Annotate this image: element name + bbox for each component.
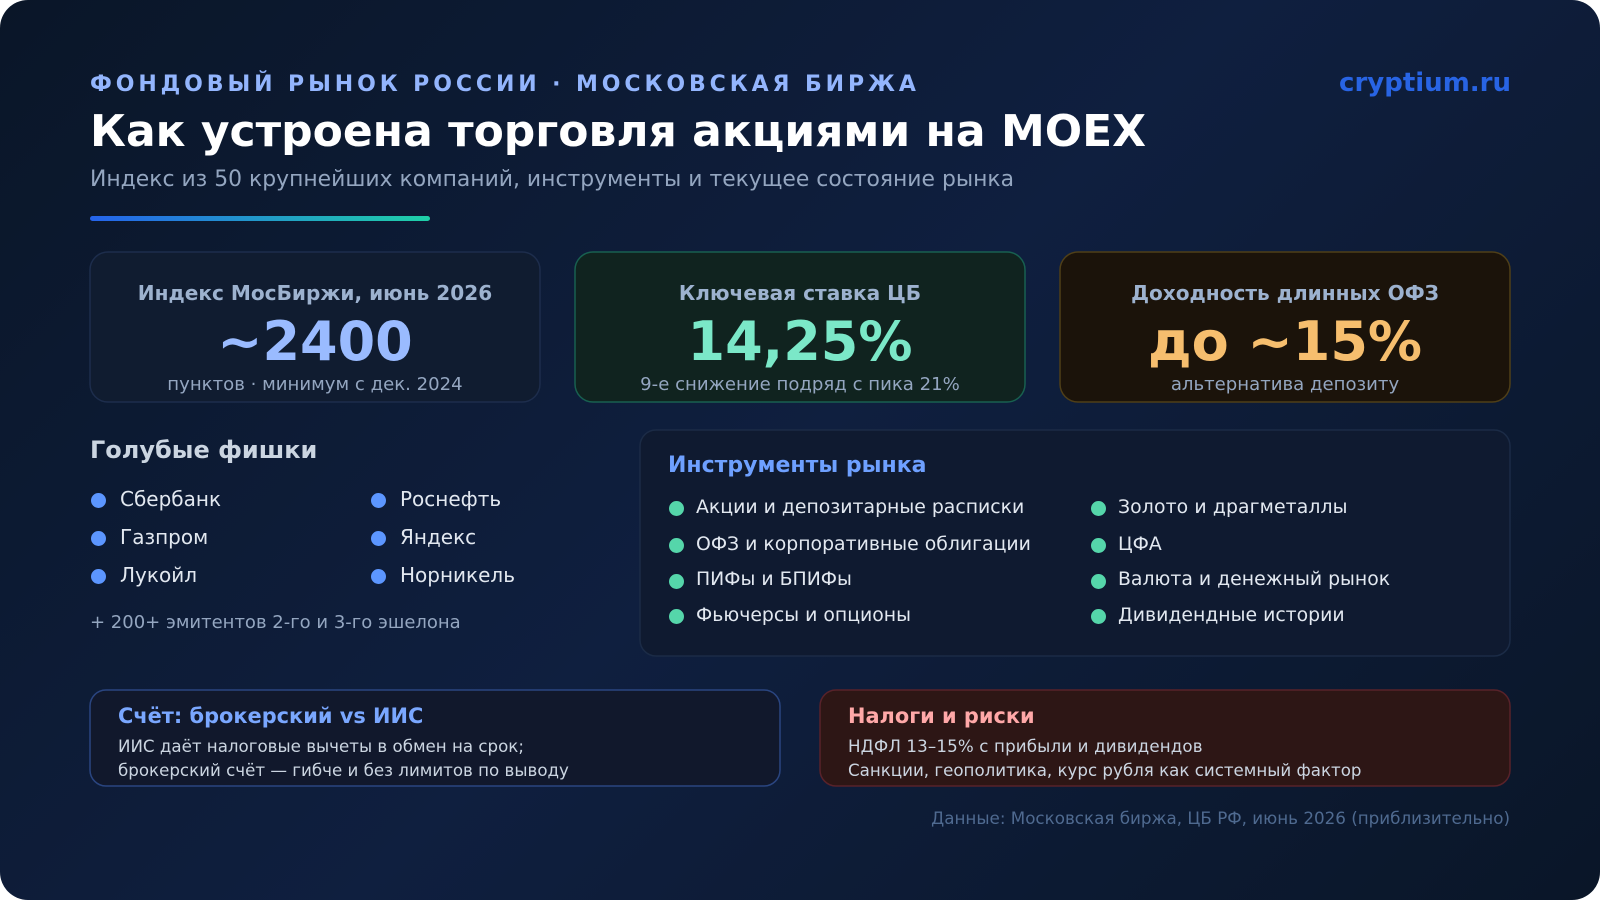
panel: key rate card: [574, 251, 1026, 403]
card value: ~2400: [217, 310, 413, 373]
panel: blue chips: [90, 436, 515, 633]
subtitle: Индекс из 50 крупнейших компаний, инструменты и текущее состояние рынка: [90, 167, 1014, 192]
panel: market instruments: [640, 429, 1511, 657]
body text: НДФЛ 13–15% с прибыли и дивидендов: [848, 737, 1203, 756]
list item: Фьючерсы и опционы: [696, 605, 911, 626]
brand: cryptium.ru: [1339, 68, 1511, 98]
list item: Золото и драгметаллы: [1118, 497, 1348, 518]
list item: Сбербанк: [120, 487, 221, 511]
card note: пунктов · минимум с дек. 2024: [167, 374, 463, 395]
note: + 200+ эмитентов 2-го и 3-го эшелона: [90, 612, 461, 633]
card value: до ~15%: [1148, 310, 1422, 373]
list item: [1091, 534, 1162, 555]
panel: index card: [89, 251, 541, 403]
source note: Данные: Московская биржа, ЦБ РФ, июнь 2026 (приблизительно): [931, 808, 1510, 828]
panel: OFZ yield card: [1059, 251, 1511, 403]
card note: 9-е снижение подряд с пика 21%: [640, 374, 960, 395]
title: Как устроена торговля акциями на MOEX: [90, 106, 1146, 157]
card label: Ключевая ставка ЦБ: [679, 281, 921, 305]
heading: Голубые фишки: [90, 436, 317, 464]
eyebrow: ФОНДОВЫЙ РЫНОК РОССИИ · МОСКОВСКАЯ БИРЖА: [90, 72, 920, 97]
list item: Валюта и денежный рынок: [1118, 569, 1390, 590]
panel: taxes and risks: [819, 689, 1511, 787]
list item: ЦФА: [1118, 534, 1162, 555]
list item: Роснефть: [400, 487, 501, 511]
list item: ОФЗ и корпоративные облигации: [696, 534, 1031, 555]
panel: account types: [89, 689, 781, 787]
heading: Инструменты рынка: [668, 453, 927, 478]
heading: Налоги и риски: [848, 704, 1035, 728]
accent bar: [90, 216, 430, 221]
list item: Яндекс: [400, 525, 476, 549]
card label: Индекс МосБиржи, июнь 2026: [138, 281, 492, 305]
list item: ПИФы и БПИФы: [696, 569, 852, 590]
body text: ИИС даёт налоговые вычеты в обмен на срок;: [118, 737, 524, 756]
card value: 14,25%: [688, 310, 912, 373]
list item: Лукойл: [120, 563, 197, 587]
list item: Дивидендные истории: [1118, 605, 1345, 626]
list item: Акции и депозитарные расписки: [696, 497, 1024, 518]
header: [90, 70, 1146, 221]
body text: Санкции, геополитика, курс рубля как системный фактор: [848, 761, 1362, 780]
list item: Газпром: [120, 525, 208, 549]
card label: Доходность длинных ОФЗ: [1131, 281, 1439, 305]
card note: альтернатива депозиту: [1171, 374, 1399, 395]
body text: брокерский счёт — гибче и без лимитов по выводу: [118, 761, 569, 780]
heading: Счёт: брокерский vs ИИС: [118, 704, 423, 728]
list item: Норникель: [400, 563, 515, 587]
